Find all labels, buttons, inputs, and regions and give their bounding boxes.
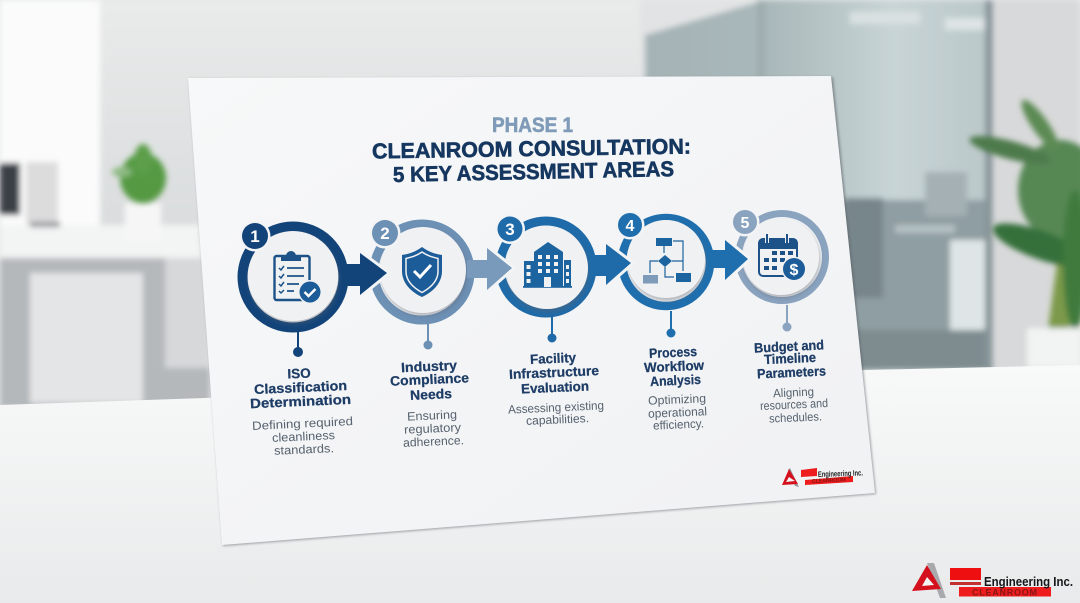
text: step 2: Ensuring: [407, 407, 457, 424]
badge 1: 1: [250, 227, 260, 246]
logo: CLEANROOM: [972, 588, 1037, 598]
text: step 5: Parameters: [757, 364, 826, 381]
step 4 ring: [622, 218, 710, 338]
plant left: [112, 144, 166, 203]
badge 3: [495, 214, 525, 244]
disc 1: [248, 231, 338, 321]
text: step 5: Timeline: [764, 350, 817, 367]
text: step 1: [250, 365, 353, 458]
text: step 1: Defining required: [252, 414, 353, 433]
card logo: [782, 468, 863, 487]
text: step 2: Industry: [401, 358, 458, 375]
card: [188, 76, 876, 546]
text: step 3: [508, 350, 604, 428]
badge 2: 2: [380, 224, 390, 243]
badge 5: 5: [741, 215, 750, 232]
text: step 3: Infrastructure: [509, 363, 600, 382]
step 3 ring: [500, 221, 592, 342]
text: step 2: [390, 358, 470, 450]
plant right: [967, 96, 1080, 368]
text: step 5: Aligning: [773, 385, 814, 400]
text: step 4: Workflow: [644, 358, 705, 375]
text: step 3: Assessing existing: [508, 398, 604, 417]
text: step 2: Needs: [410, 386, 452, 403]
logo: [912, 563, 1073, 598]
text: step 3: Facility: [530, 350, 577, 367]
arrow 1: [342, 253, 387, 295]
text: step 4: Process: [649, 344, 697, 361]
text: step 1: cleanliness: [272, 428, 335, 445]
text: step 4: [644, 344, 707, 433]
icon: building: [523, 242, 572, 288]
table surface: [0, 365, 1080, 603]
arrow 3: [590, 244, 631, 285]
step 1 ring: [242, 226, 344, 357]
text: step 2: Compliance: [390, 370, 470, 389]
card logo: CLEANROOM: [812, 477, 846, 485]
icon: flowchart: [643, 238, 691, 284]
disc 2: [380, 227, 466, 313]
title: [372, 113, 691, 187]
arrow 2: [467, 248, 512, 290]
badge 4: 4: [626, 218, 635, 235]
arrow 4: [708, 240, 748, 280]
text: step 5: Budget and: [754, 337, 824, 356]
text: step 5: resources and: [760, 396, 828, 413]
icon: shield: [402, 247, 442, 297]
text: step 4: Optimizing: [648, 391, 706, 408]
badge 2: [370, 218, 400, 248]
text: step 1: standards.: [274, 441, 334, 458]
badge 5: [730, 208, 760, 236]
text: step 3: capabilities.: [526, 411, 589, 428]
text: step 1: Classification: [254, 378, 347, 397]
disc 3: [506, 227, 588, 309]
disc 4: [627, 220, 705, 298]
text: step 3: Evaluation: [521, 379, 589, 396]
badge 1: [240, 220, 270, 252]
text: step 1: ISO: [287, 365, 311, 381]
title: 5 KEY ASSESSMENT AREAS: [393, 157, 674, 187]
card logo: Engineering Inc.: [818, 468, 863, 479]
text: step 4: Analysis: [650, 372, 701, 389]
text: step 2: regulatory: [404, 420, 461, 437]
step 2 ring: [374, 224, 470, 350]
text: step 4: operational: [648, 404, 707, 421]
badge 3: 3: [505, 220, 515, 239]
disc 5: [743, 219, 819, 295]
title: CLEANROOM CONSULTATION:: [372, 134, 691, 164]
icon: calendar: [759, 234, 806, 282]
step 5 ring: [738, 214, 826, 332]
icon: calendar: $: [790, 262, 799, 279]
text: step 5: [754, 337, 828, 426]
badge 4: [616, 210, 644, 240]
text: step 1: Determination: [250, 392, 351, 411]
icon: clipboard: [274, 251, 322, 304]
title: PHASE 1: [492, 113, 573, 137]
text: step 2: adherence.: [403, 433, 464, 450]
text: step 4: efficiency.: [653, 416, 704, 433]
text: step 5: schedules.: [769, 409, 822, 426]
